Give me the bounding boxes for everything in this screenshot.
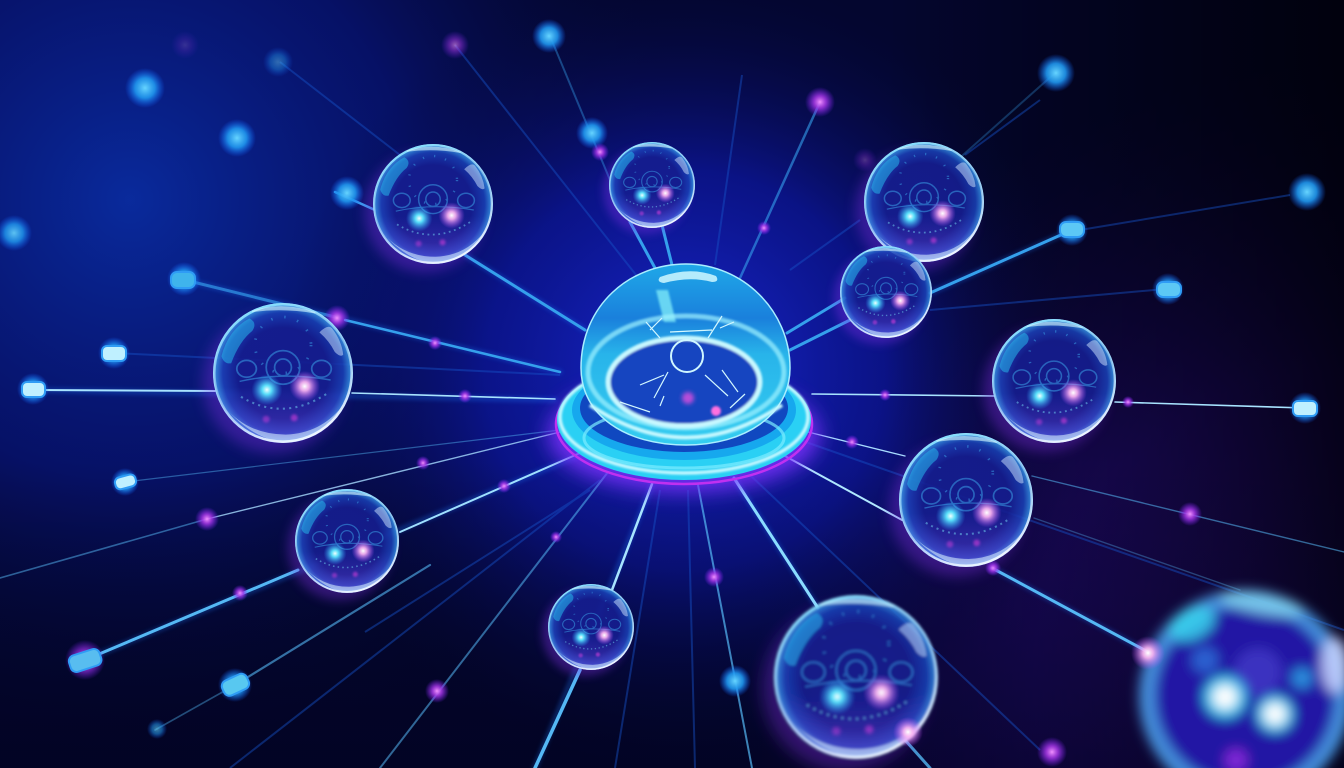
glass sphere: upper left <box>365 144 493 272</box>
connector core: lower <box>0 430 1344 768</box>
glass sphere: lower right <box>890 433 1033 576</box>
glass dome <box>581 264 790 445</box>
glass sphere: foreground bottom right, blurred <box>1141 587 1344 768</box>
glowing node on foreground sphere <box>1131 636 1165 670</box>
glass sphere: top centre <box>603 142 695 234</box>
hub glow <box>548 376 820 492</box>
dome vertical light beam <box>656 290 676 322</box>
glass sphere: bottom centre large, soft focus <box>763 595 938 768</box>
glass sphere: upper right <box>856 142 984 270</box>
glowing node on large sphere <box>893 717 923 747</box>
central hub dome <box>548 264 820 492</box>
connector core: upper <box>185 36 1072 372</box>
outer nodes: purple and pink <box>171 31 1202 767</box>
capsule end nodes <box>22 222 1317 698</box>
inner ring platform <box>588 316 784 428</box>
glass sphere: right of dome <box>834 246 932 344</box>
connector core: horizontal <box>35 390 1305 408</box>
hub base disc <box>556 360 812 484</box>
glass sphere: right <box>983 319 1116 452</box>
glass sphere: bottom centre small <box>542 584 634 676</box>
dome lower rim light <box>590 405 782 438</box>
dome top highlight <box>659 271 717 283</box>
glass sphere: lower left <box>288 489 399 600</box>
glass sphere: left <box>203 303 353 453</box>
connector glow <box>35 230 1148 768</box>
